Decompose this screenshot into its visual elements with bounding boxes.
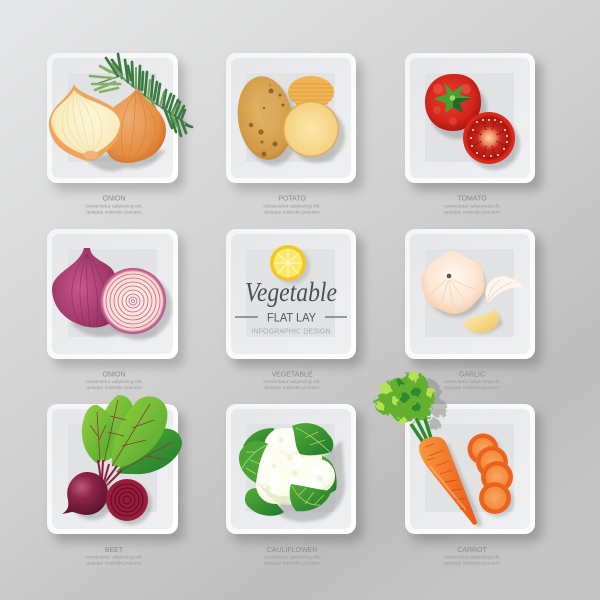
label <box>443 547 501 566</box>
icon: cauliflower leaf left <box>239 441 268 483</box>
subheading: INFOGRAPHIC DESIGN <box>252 328 330 336</box>
panel: cauliflower <box>226 404 363 566</box>
label <box>85 196 143 216</box>
icon: carrot slices <box>468 434 514 517</box>
plate <box>47 229 184 367</box>
plate <box>226 404 363 542</box>
panel: title card <box>226 229 363 391</box>
icon: garlic clove peel <box>486 276 524 303</box>
label: consectetur adipiscing elit, <box>85 204 143 210</box>
panel: red onion <box>47 229 184 391</box>
label: consectetur adipiscing elit, <box>85 554 143 560</box>
icon: carrot <box>419 437 480 526</box>
label: ONION <box>103 372 125 378</box>
label: quisque molestie posuere <box>444 210 500 216</box>
heading: flat lay: FLAT LAY <box>267 310 316 324</box>
plate <box>47 404 184 542</box>
label: quisque molestie posuere <box>264 385 320 391</box>
label: consectetur adipiscing elit, <box>443 204 501 210</box>
label: consectetur adipiscing elit, <box>85 379 143 385</box>
label: quisque molestie posuere <box>264 560 320 566</box>
label: consectetur adipiscing elit, <box>263 379 321 385</box>
icon: beet slice <box>106 479 152 525</box>
panel: potato <box>226 53 363 216</box>
icon: whole potato <box>232 73 304 169</box>
label: CAULIFLOWER <box>267 547 317 554</box>
icon: tomato slice <box>463 112 520 170</box>
icon: cauliflower leaf bottom <box>290 484 331 511</box>
icon: whole red onion <box>52 248 125 337</box>
icon: red onion slice <box>100 268 172 340</box>
icon: garlic bulb <box>421 251 486 317</box>
plate <box>47 53 184 191</box>
icon: whole onion <box>84 87 166 171</box>
label <box>263 196 321 216</box>
label: ONION <box>103 196 125 202</box>
plate <box>405 404 542 542</box>
label: quisque molestie posuere <box>264 210 320 216</box>
label: GARLIC <box>459 372 485 378</box>
icon: carrot tops <box>375 371 447 442</box>
heading: Vegetable: Vegetable <box>245 277 337 307</box>
plate <box>226 229 363 367</box>
panel: carrot <box>375 371 542 566</box>
icon: whole tomato <box>425 74 487 139</box>
label <box>263 372 321 391</box>
panel: beet <box>47 395 184 566</box>
icon: yellow garlic clove <box>462 310 503 334</box>
label <box>85 547 143 566</box>
label <box>443 372 501 391</box>
icon: cauliflower shadow <box>275 440 345 522</box>
icon: cauliflower curd <box>253 428 335 505</box>
panel: garlic <box>405 229 542 391</box>
label: quisque molestie posuere <box>86 210 142 216</box>
icon: potato chip <box>288 76 334 108</box>
heading: flat lay <box>235 310 347 324</box>
plate <box>405 229 542 367</box>
label <box>263 547 321 566</box>
icon: beet leaves <box>82 395 182 474</box>
icon: potato slice <box>283 101 345 163</box>
label: consectetur adipiscing elit, <box>443 554 501 560</box>
label: quisque molestie posuere <box>86 385 142 391</box>
panel: brown onion <box>47 53 192 216</box>
icon: beet root <box>62 460 122 520</box>
label: TOMATO <box>457 196 487 202</box>
label: consectetur adipiscing elit, <box>443 379 501 385</box>
label: quisque molestie posuere <box>86 560 142 566</box>
label: POTATO <box>278 196 306 202</box>
panel: tomato <box>405 53 542 216</box>
label: consectetur adipiscing elit, <box>263 554 321 560</box>
label: VEGETABLE <box>271 372 313 378</box>
icon: lemon slice <box>270 245 310 284</box>
label: CARROT <box>457 547 487 554</box>
label: quisque molestie posuere <box>444 385 500 391</box>
icon: cauliflower leaves behind <box>243 428 337 516</box>
label: consectetur adipiscing elit, <box>263 204 321 210</box>
plate <box>226 53 363 191</box>
label: quisque molestie posuere <box>444 560 500 566</box>
label <box>85 372 143 391</box>
icon: rosemary <box>90 54 192 136</box>
icon: cut onion <box>49 84 122 161</box>
label: BEET <box>105 547 124 554</box>
label <box>443 196 501 216</box>
icon: cauliflower leaf top <box>292 423 333 455</box>
plate <box>405 53 542 191</box>
